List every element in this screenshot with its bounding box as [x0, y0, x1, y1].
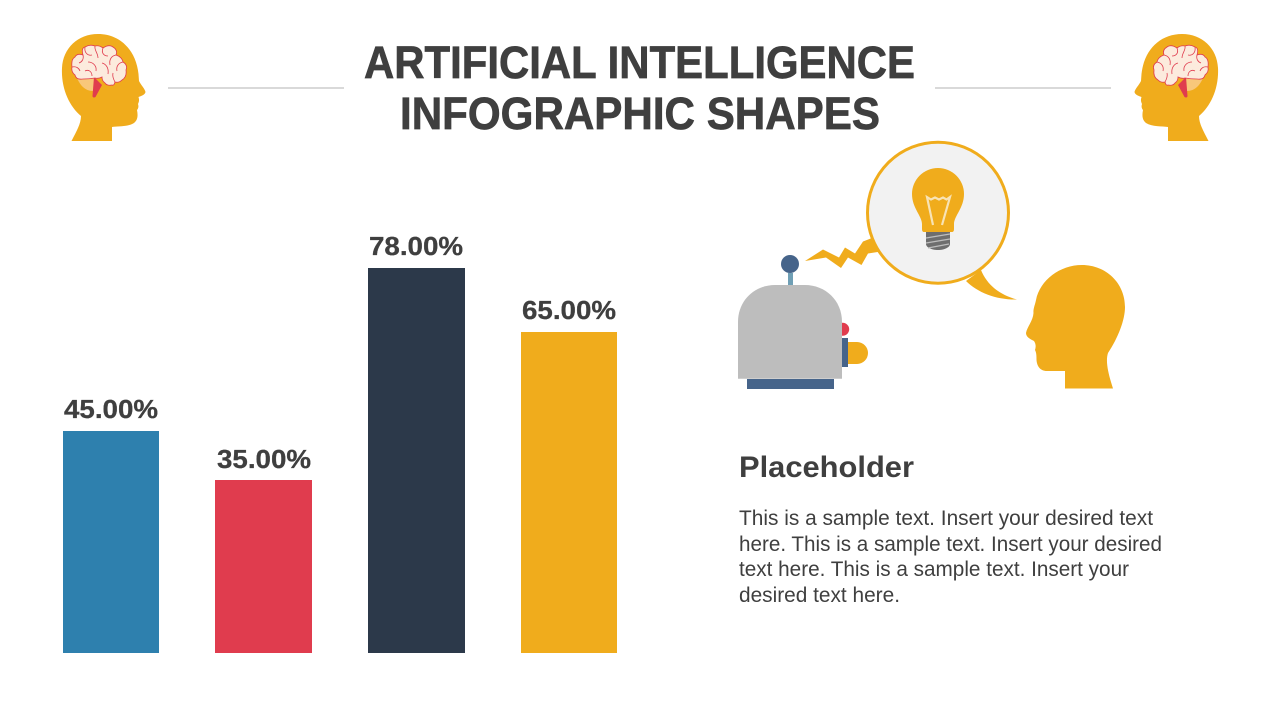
text block: here. This is a sample text. Insert your desired: [739, 532, 1162, 556]
bar: 65.00%: [521, 295, 617, 653]
bar: 35.00%: 35.00%: [217, 444, 311, 474]
icon: right head with brain: [1134, 34, 1218, 141]
icon: left head with brain: [62, 34, 146, 141]
divider line right: [935, 87, 1111, 89]
bar: 78.00%: [368, 231, 465, 653]
bar: 45.00%: 45.00%: [64, 394, 158, 424]
divider line left: [168, 87, 344, 89]
bar: 78.00%: 78.00%: [369, 231, 463, 261]
bar: 35.00%: [215, 444, 312, 653]
bar: 65.00%: 65.00%: [522, 295, 616, 325]
icon: speech bubble tail: [966, 270, 1017, 300]
icon: human head: [1026, 265, 1125, 388]
icon: light bulb: [912, 168, 964, 250]
bar chart: [63, 231, 617, 653]
icon: lightning speech link: [805, 238, 884, 268]
title: ARTIFICIAL INTELLIGENCE: [364, 37, 915, 88]
text block: desired text here.: [739, 583, 900, 607]
icon: robot: [738, 255, 868, 389]
title: INFOGRAPHIC SHAPES: [400, 88, 880, 139]
bar: 45.00%: [63, 394, 159, 653]
text block: [739, 506, 1162, 607]
title: [364, 37, 915, 139]
heading: placeholder: Placeholder: [739, 451, 914, 484]
text block: This is a sample text. Insert your desired text: [739, 506, 1153, 530]
icon: thought bubble: [868, 142, 1008, 283]
text block: text here. This is a sample text. Insert your: [739, 557, 1129, 581]
